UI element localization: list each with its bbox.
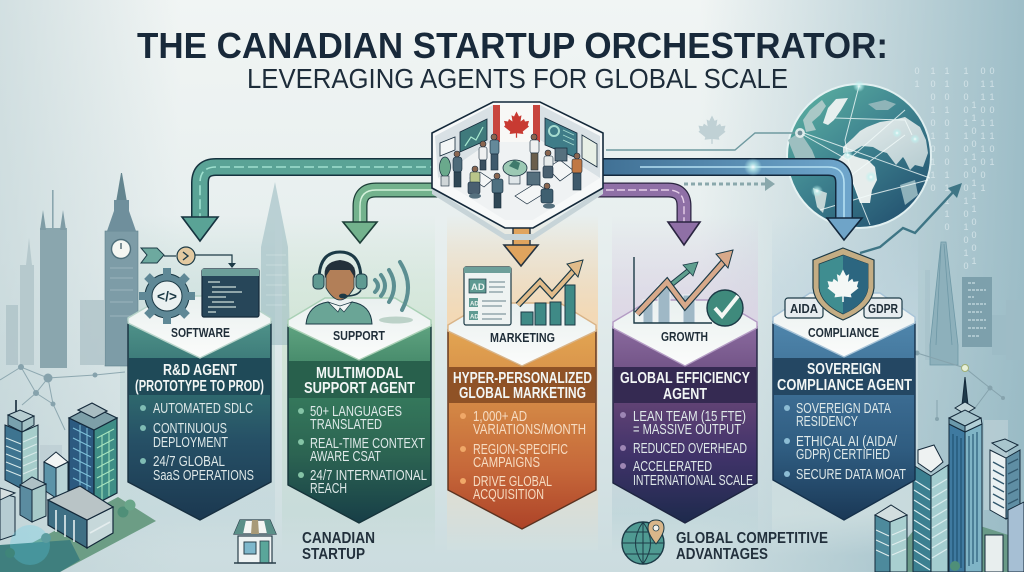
bullet list [140, 400, 254, 484]
binary data columns: 1001010110 [928, 66, 938, 196]
title band [774, 358, 914, 395]
bullet list: REACH [310, 480, 347, 497]
title band [449, 367, 595, 403]
title band: AGENT [663, 386, 707, 403]
badge: GDPR [864, 298, 902, 318]
bullet list: ACQUISITION [473, 486, 544, 503]
arrow: to growth [595, 190, 700, 245]
badge: GDPR: GDPR [868, 301, 898, 316]
binary data columns: 01101101 [987, 66, 997, 170]
wall screens [440, 118, 597, 167]
icon: ad page [464, 267, 511, 325]
building: low striped [20, 477, 46, 522]
icon: gear [139, 268, 195, 324]
bullet list: CONTINUOUS [153, 420, 227, 437]
badge: AIDA: AIDA [790, 301, 819, 316]
bullet list: REDUCED OVERHEAD [633, 440, 747, 457]
platform [448, 303, 596, 366]
people [453, 134, 582, 208]
icon: code window [202, 269, 259, 317]
pale tower [261, 182, 290, 345]
bullet list [784, 400, 906, 483]
platform [613, 300, 757, 366]
binary data columns: 1000110100101010 [961, 66, 971, 274]
bullet list: REAL-TIME CONTEXT [310, 435, 425, 452]
binary data columns: 1100101110001 [969, 100, 979, 269]
bullet list: VARIATIONS/MONTH [473, 421, 586, 438]
arrow: to support [343, 190, 440, 243]
left skyline [6, 173, 290, 368]
title band: SOVEREIGN [807, 361, 881, 378]
icon: store [234, 520, 276, 563]
flag [493, 105, 540, 142]
binary data columns: 01 [912, 66, 922, 92]
big ben [105, 173, 138, 366]
thin connector line to globe [606, 128, 805, 150]
bullet list: DRIVE GLOBAL [473, 473, 552, 490]
building: low front [875, 502, 1024, 572]
bullet list: RESIDENCY [796, 413, 858, 430]
building: wide low [48, 486, 113, 548]
bullet list: TRANSLATED [310, 416, 382, 433]
label: canadian startup [302, 530, 375, 563]
subtitle: LEVERAGING AGENTS FOR GLOBAL SCALE [247, 63, 788, 94]
binary data columns [912, 66, 997, 274]
title band [614, 367, 756, 403]
bullet list: SECURE DATA MOAT [796, 466, 906, 483]
label: global competitive advantages: ADVANTAGES [676, 546, 768, 563]
icon: shield [813, 248, 874, 320]
panel: marketing [448, 260, 596, 529]
platform [128, 296, 271, 358]
icon: support agent [306, 252, 413, 324]
building: spire tower [949, 377, 982, 572]
arrow: to marketing [504, 225, 538, 266]
table and hologram [503, 160, 527, 184]
title band: HYPER-PERSONALIZED [453, 370, 592, 387]
icon: gear: </> [157, 288, 177, 304]
trend arrow [860, 183, 962, 253]
right city [875, 377, 1024, 572]
platform [773, 293, 915, 357]
bullet list: 24/7 INTERNATIONAL [310, 467, 427, 484]
panel: software [128, 247, 271, 520]
bullet list: INTERNATIONAL SCALE [633, 472, 753, 489]
bullet list: ETHICAL AI (AIDA/ [796, 433, 898, 450]
bullet list: 24/7 GLOBAL [153, 453, 225, 470]
platform [288, 298, 431, 360]
label: global competitive advantages: GLOBAL COMPETITIVE [676, 530, 828, 547]
bullet list: GDPR) CERTIFIED [796, 446, 890, 463]
icon: ad page: AD [471, 282, 485, 293]
network right [914, 350, 1005, 421]
icon: growth chart [634, 250, 743, 326]
icon: globe with pin [622, 520, 664, 564]
label: SOFTWARE [171, 325, 230, 340]
label: canadian startup: CANADIAN [302, 530, 375, 547]
icon: workflow [141, 247, 236, 268]
icon: ad page: AD [470, 302, 479, 308]
central office [432, 102, 603, 240]
bullet list: SaaS OPERATIONS [153, 467, 254, 484]
title band [129, 358, 270, 395]
bullet list [298, 403, 427, 497]
badge: AIDA [785, 298, 823, 318]
title band: COMPLIANCE AGENT [777, 377, 912, 394]
left city [0, 400, 156, 572]
building: tall glass [69, 403, 117, 505]
title band: GLOBAL MARKETING [459, 385, 586, 402]
panel: support [288, 252, 431, 523]
panel: growth [613, 250, 757, 523]
dashed arrow [684, 177, 775, 191]
desks [470, 148, 574, 204]
icon: faint maple leaf [698, 116, 726, 144]
bullet list: DEPLOYMENT [153, 434, 228, 451]
binary data columns: 0110111001 [978, 66, 988, 196]
label: global competitive advantages [676, 530, 828, 563]
building: tall striped [5, 410, 38, 489]
label: COMPLIANCE [808, 325, 879, 340]
building: right [990, 439, 1020, 519]
label: canadian startup: STARTUP [302, 546, 365, 563]
network left [0, 364, 125, 430]
icon: growth bars [518, 260, 583, 325]
bullet list: SOVEREIGN DATA [796, 400, 891, 417]
title [137, 25, 888, 94]
bullet list: 1,000+ AD [473, 408, 527, 425]
title band: SUPPORT AGENT [304, 380, 415, 397]
bullet list [460, 408, 586, 503]
icon: ad page: AD [470, 314, 479, 320]
bullet list: 50+ LANGUAGES [310, 403, 402, 420]
bullet list [620, 408, 753, 489]
arrow: to software [182, 167, 440, 241]
label: MARKETING [490, 330, 555, 345]
title band: MULTIMODAL [316, 365, 403, 382]
building: small [44, 452, 68, 498]
panel: compliance [773, 248, 915, 520]
binary data columns: 1101010011110 [942, 66, 952, 235]
plant [440, 157, 450, 186]
title band: (PROTOTYPE TO PROD) [135, 378, 264, 395]
title band: GLOBAL EFFICIENCY [620, 370, 751, 387]
arrow: to compliance [595, 158, 862, 240]
bullet list: = MASSIVE OUTPUT [633, 421, 741, 438]
bullet list: AUTOMATED SDLC [153, 400, 253, 417]
building: striped left [913, 445, 948, 572]
building: edge [0, 488, 15, 540]
label: GROWTH [661, 329, 708, 344]
title band [289, 361, 430, 398]
bullet list: REGION-SPECIFIC [473, 441, 568, 458]
right skyline [925, 242, 1024, 365]
title: THE CANADIAN STARTUP ORCHESTRATOR: [137, 25, 888, 66]
bullet list: ACCELERATED [633, 458, 712, 475]
bullet list: AWARE CSAT [310, 448, 381, 465]
globe [786, 80, 932, 229]
bullet list: LEAN TEAM (15 FTE) [633, 408, 746, 425]
label: SUPPORT [333, 328, 385, 343]
bullet list: CAMPAIGNS [473, 454, 540, 471]
title band: R&D AGENT [163, 362, 237, 379]
